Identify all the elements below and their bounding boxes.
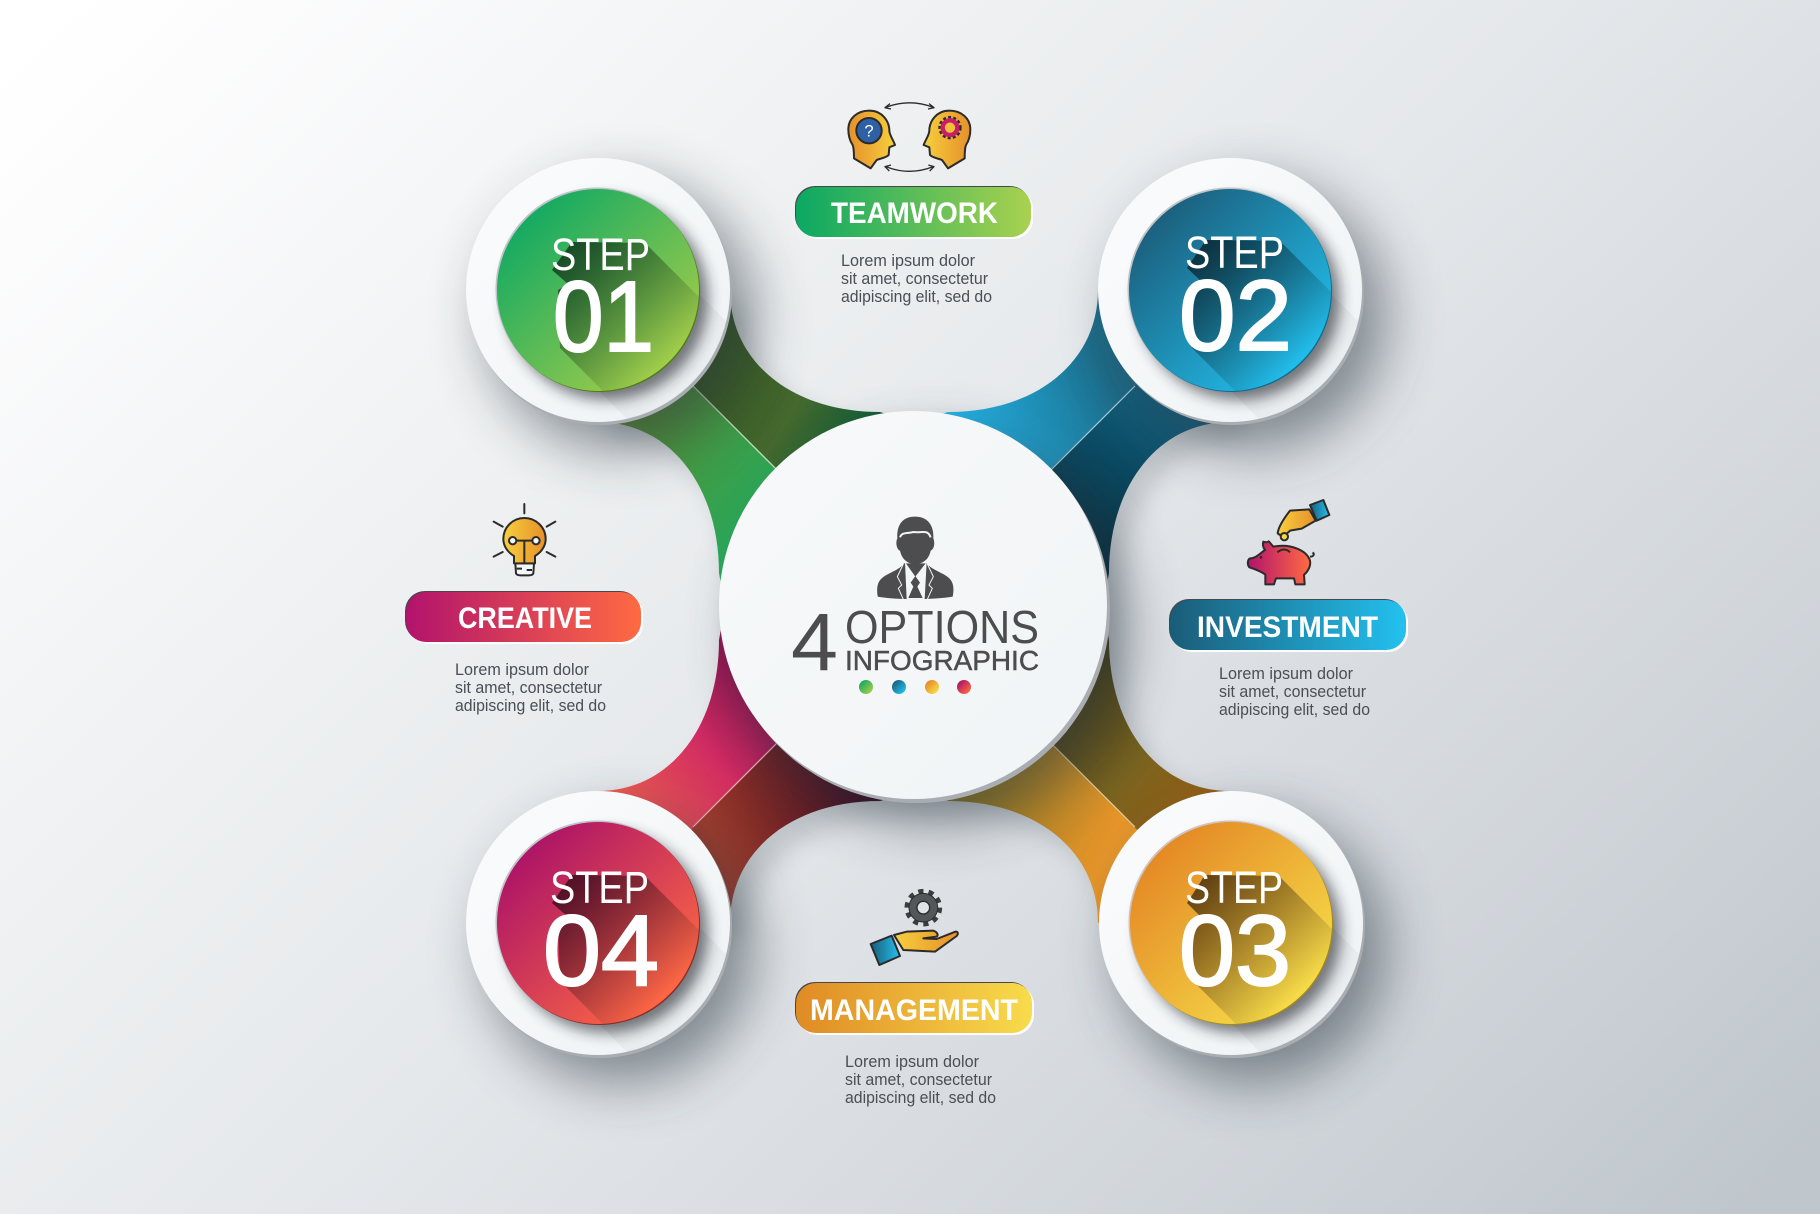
pill: management xyxy=(795,982,1034,1035)
text: management description xyxy=(845,1053,996,1107)
text: teamwork description: adipiscing elit, sed do xyxy=(841,288,992,306)
arm: step 03 connector xyxy=(914,606,1230,923)
text: teamwork description: sit amet, consectetur xyxy=(841,270,988,288)
step 03 number: 03 xyxy=(1179,895,1291,1007)
pill: creative xyxy=(405,591,643,644)
arm: step 02 connector xyxy=(914,290,1230,606)
step 02 label: STEP xyxy=(1185,227,1284,278)
text: teamwork description: Lorem ipsum dolor xyxy=(841,252,975,270)
text: teamwork description xyxy=(841,252,992,306)
text: investment description xyxy=(1219,665,1370,719)
arm: step 01 connector xyxy=(598,290,914,606)
icon: piggy bank with hand xyxy=(1248,500,1329,584)
text: investment description: Lorem ipsum dolor xyxy=(1219,665,1353,683)
centre circle xyxy=(719,411,1110,803)
icon: two heads xyxy=(848,103,970,171)
text: creative description: Lorem ipsum dolor xyxy=(455,661,589,679)
text: management description: adipiscing elit, sed do xyxy=(845,1089,996,1107)
title: 4 options infographic xyxy=(791,597,1039,688)
title: 4 options infographic: INFOGRAPHIC xyxy=(845,645,1039,676)
icon: light bulb xyxy=(494,504,555,575)
step 04 label: STEP xyxy=(550,862,649,913)
panel: investment xyxy=(1169,500,1408,719)
step 02 number: 02 xyxy=(1179,260,1292,372)
step 03 badge xyxy=(1099,791,1365,1058)
step 01 number: 01 xyxy=(553,261,654,373)
text: creative description: sit amet, consectetur xyxy=(455,679,602,697)
step 04 number: 04 xyxy=(543,895,659,1007)
step 02 badge xyxy=(1098,158,1364,425)
panel: management xyxy=(795,892,1034,1107)
step 04 badge xyxy=(466,791,732,1058)
pill: creative: CREATIVE xyxy=(458,602,592,635)
text: management description: sit amet, consectetur xyxy=(845,1071,992,1089)
pill: investment: INVESTMENT xyxy=(1197,611,1378,644)
arm: step 04 connector xyxy=(598,606,914,923)
pill: management: MANAGEMENT xyxy=(810,994,1018,1027)
title: 4 options infographic: 4 xyxy=(791,597,838,688)
arm shadows on the background xyxy=(612,306,1244,939)
title: 4 options infographic: OPTIONS xyxy=(845,601,1039,653)
step 01 badge xyxy=(466,158,732,425)
text: investment description: adipiscing elit, sed do xyxy=(1219,701,1370,719)
text: management description: Lorem ipsum dolor xyxy=(845,1053,979,1071)
legend dots xyxy=(859,680,971,694)
text: creative description: adipiscing elit, sed do xyxy=(455,697,606,715)
icon: gear over hand xyxy=(871,892,958,965)
text: creative description xyxy=(455,661,606,715)
pill: investment xyxy=(1169,599,1408,652)
step 03 label: STEP xyxy=(1185,862,1283,913)
panel: teamwork xyxy=(795,103,1033,306)
step 01 label: STEP xyxy=(551,229,650,280)
pill: teamwork: TEAMWORK xyxy=(831,197,998,230)
panel: creative xyxy=(405,504,643,715)
text: investment description: sit amet, consectetur xyxy=(1219,683,1366,701)
icon: two heads: ? xyxy=(864,122,874,141)
pill: teamwork xyxy=(795,186,1033,239)
icon: businessman xyxy=(877,517,953,599)
cast shadows of circles xyxy=(486,182,1386,1083)
